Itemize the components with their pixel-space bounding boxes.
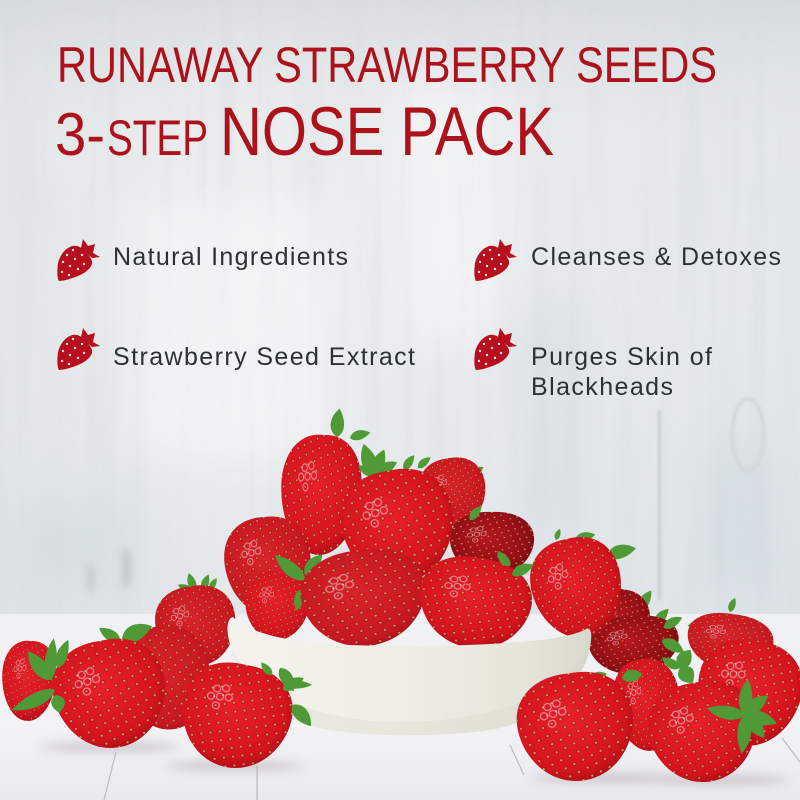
title: NOSE PACK: [220, 93, 554, 170]
icon: strawberry: [474, 239, 517, 281]
loose strawberries on the left: [0, 611, 317, 781]
title: 3-: [55, 101, 105, 168]
icon: strawberry: [57, 239, 100, 281]
benefit: strawberry seed extract: [57, 328, 415, 371]
benefit: cleanses and detoxes: [474, 239, 781, 281]
benefit: natural ingredients: [57, 239, 348, 281]
icon: strawberry: [474, 328, 517, 370]
benefit: strawberry seed extract: Strawberry Seed Extract: [113, 343, 415, 371]
berries behind the bowl: [149, 572, 778, 679]
benefit: purges skin of blackheads: Purges Skin of: [531, 343, 712, 371]
icon: strawberry: [57, 328, 100, 370]
wall background: [0, 0, 800, 620]
benefit: purges skin of blackheads: [474, 328, 712, 401]
white wooden table: [0, 614, 800, 800]
benefit: natural ingredients: Natural Ingredients: [113, 243, 348, 271]
benefit: cleanses and detoxes: Cleanses & Detoxes: [531, 243, 781, 271]
loose strawberries on the right: [508, 627, 800, 793]
title: STEP: [107, 110, 208, 166]
heap of strawberries: [219, 408, 638, 659]
white bowl: [227, 617, 591, 735]
title: [55, 37, 717, 170]
benefit: purges skin of blackheads: Blackheads: [531, 373, 673, 401]
photo: strawberries in bowl: [0, 408, 800, 793]
